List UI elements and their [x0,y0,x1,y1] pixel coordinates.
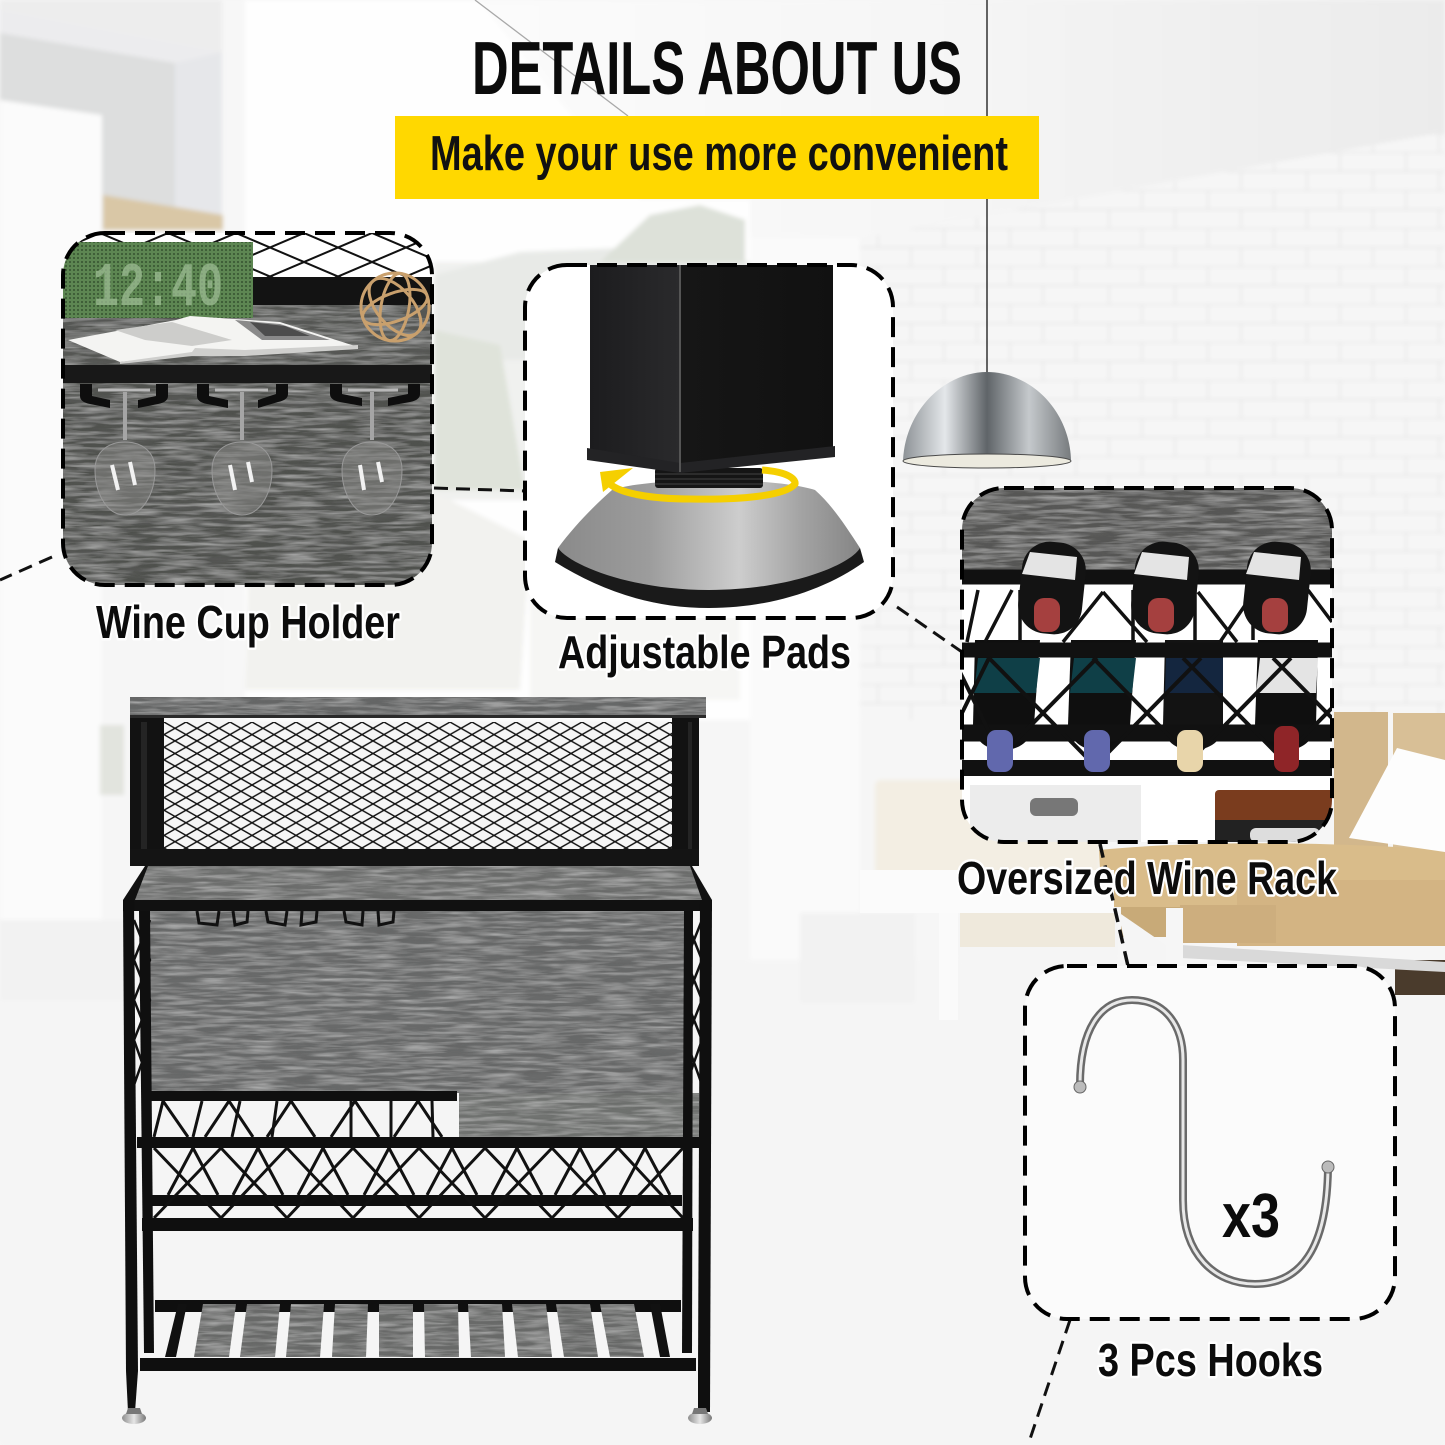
panel: wine cup holder detail [63,233,433,585]
metal feet [122,1408,712,1424]
lower row of wine bottles [973,640,1318,750]
icon: open book [68,316,358,364]
label: adjustable pads: Adjustable Pads [558,626,851,678]
connector: wine cup holder left [0,557,52,580]
bottle corks, lower row [987,726,1299,772]
wood back panel [150,911,686,1093]
bottom storage items [970,785,1335,845]
multiplier x3: x3 [1222,1182,1280,1251]
panel: oversized wine rack detail [960,486,1334,844]
bottom slatted shelf [194,1304,644,1357]
wine glasses on hooks [80,384,420,515]
panel: 3 pcs hooks detail [1025,966,1395,1319]
icon: adjustable foot pad [555,265,864,608]
connector: wine cup holder to pads [434,488,525,491]
upper rack lattice [154,1101,442,1137]
posts and frame [123,900,712,1412]
background: tan sofa [860,712,1445,1020]
label: 3 pcs hooks: 3 Pcs Hooks [1098,1334,1323,1386]
icon: pendant lamp [903,0,1071,468]
slat shelf end brackets [165,1304,670,1357]
icon: green digital clock [63,242,253,324]
icon: woven ball [358,269,432,345]
icon: green digital clock: 12:40 [93,253,223,324]
label: oversized wine rack: Oversized Wine Rack [957,852,1337,904]
subtitle banner: Make your use more convenient [430,127,1008,181]
lower rack lattice [154,1148,683,1218]
panel: adjustable pads detail [525,265,893,618]
icon: S hook [1074,1000,1334,1284]
wooden step shelf [459,1093,699,1138]
subtitle banner [395,116,1039,199]
rails and lower lattice [935,650,1381,768]
glass hooks under shelf [197,911,394,925]
title: DETAILS ABOUT US [472,26,962,110]
upper lattice [962,577,1332,642]
top board [130,697,706,718]
label: wine cup holder: Wine Cup Holder [96,596,400,648]
upper row of wine bottles [1015,539,1314,637]
middle shelf [123,866,712,911]
connector: wine rack to hooks [1100,844,1128,966]
product: wine rack furniture [122,697,712,1424]
side braces [134,920,702,1085]
upper mesh panel [130,715,699,866]
connector: hooks to bottom [1028,1320,1070,1445]
connector: pads to wine rack [897,607,962,652]
